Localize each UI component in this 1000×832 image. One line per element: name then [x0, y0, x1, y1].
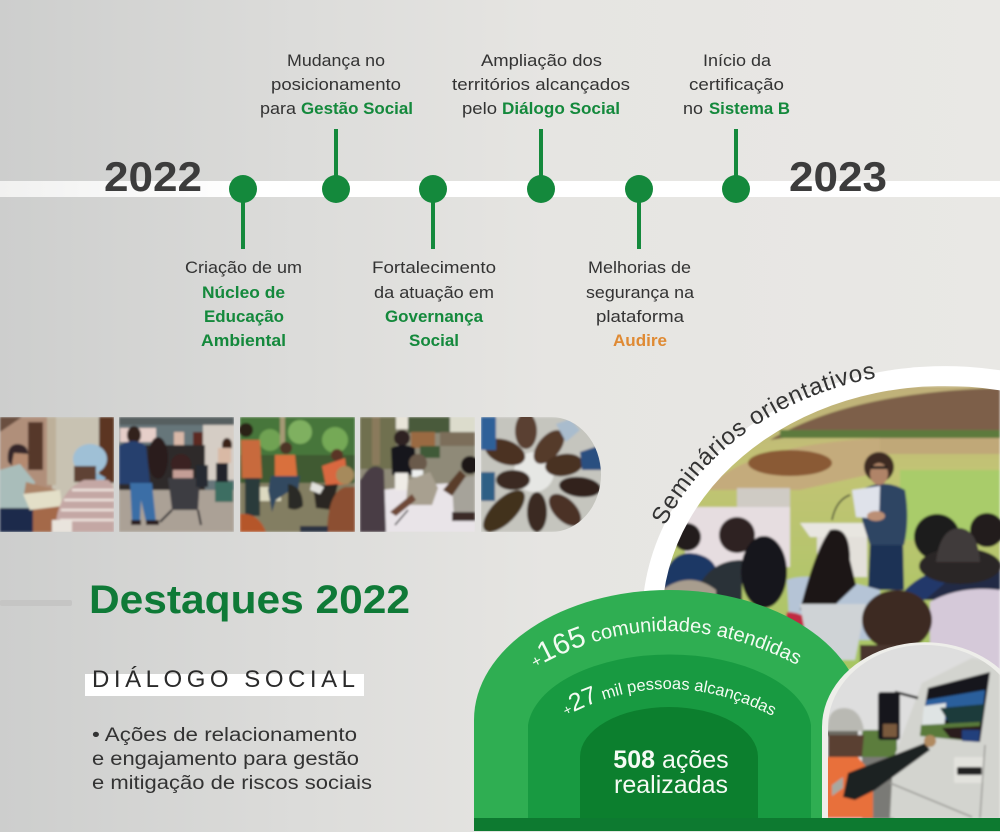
milestone: Governança Social: [372, 175, 496, 350]
bottom green bar: [474, 818, 1000, 831]
milestone: Núcleo de Educação Ambiental: Núcleo de: [202, 283, 285, 302]
body text: e engajamento para gestão: [92, 749, 359, 770]
milestone: Diálogo Social: Diálogo Social: [502, 99, 620, 118]
green arch: 27 thousand people: [528, 654, 811, 818]
white ring of truck photo: [822, 642, 1000, 818]
photo: conversation at the door: [0, 417, 114, 532]
body text: [92, 725, 372, 794]
photo: indoor meeting: [119, 417, 234, 532]
year 2022: 2022: [104, 153, 202, 200]
milestone: Sistema B: [683, 51, 790, 203]
milestone: Gestão Social: [260, 51, 413, 203]
body text: e mitigação de riscos sociais: [92, 773, 372, 794]
green arch: 508 actions: realizadas: [614, 771, 728, 799]
milestone: Diálogo Social: [452, 51, 630, 203]
milestone: Governança Social: da atuação em: [374, 283, 494, 302]
green arch: 165 communities: +165 comunidades atendidas: [532, 616, 800, 665]
milestone: Gestão Social: para: [260, 99, 297, 118]
milestone: Audire: [586, 175, 695, 350]
milestone: Audire: segurança na: [586, 283, 695, 302]
green arch: 508 actions: [580, 707, 758, 818]
milestone: Diálogo Social: Ampliação dos: [481, 51, 602, 70]
heading: Destaques 2022: Destaques 2022: [89, 578, 410, 622]
milestone: Gestão Social: posicionamento: [271, 75, 401, 94]
milestone: Sistema B: Início da: [703, 51, 772, 70]
green arch: 508 actions: 508 ações: [613, 746, 729, 774]
curved label: Seminários orientativos: Seminários orientativos: [652, 366, 875, 524]
milestone: Sistema B: Sistema B: [709, 99, 790, 118]
photo: truck driver: [823, 640, 1000, 820]
milestone: Diálogo Social: territórios alcançados: [452, 75, 630, 94]
photo: meeting under trees: [239, 417, 355, 532]
milestone: Audire: plataforma: [596, 307, 685, 326]
milestone: Diálogo Social: pelo: [462, 99, 497, 118]
milestone: Audire: Audire: [613, 331, 667, 350]
photo: group at table outdoors: [360, 417, 479, 532]
milestone: Governança Social: Fortalecimento: [372, 258, 496, 277]
milestone: Gestão Social: Mudança no: [287, 51, 385, 70]
subheading: Diálogo Social: DIÁLOGO SOCIAL: [92, 666, 355, 693]
highlights title rule: [0, 600, 72, 606]
milestone: Governança Social: Social: [409, 331, 459, 350]
green arch: 27 thousand people: +27 mil pessoas alcançadas: [564, 680, 776, 715]
photo: seminar: [660, 386, 1000, 670]
milestone: Governança Social: Governança: [385, 307, 484, 326]
body text: • Ações de relacionamento: [92, 725, 357, 746]
milestone: Audire: Melhorias de: [588, 258, 691, 277]
milestone: Núcleo de Educação Ambiental: Educação: [204, 307, 284, 326]
white ring of seminar photo: [642, 366, 1000, 818]
milestone: Sistema B: certificação: [689, 75, 784, 94]
milestone: Núcleo de Educação Ambiental: Ambiental: [201, 331, 286, 350]
milestone: Gestão Social: Gestão Social: [301, 99, 413, 118]
milestone: Núcleo de Educação Ambiental: [185, 175, 302, 350]
year 2023: 2023: [789, 153, 887, 200]
milestone: Núcleo de Educação Ambiental: Criação de um: [185, 258, 302, 277]
timeline band: [0, 181, 1000, 197]
green arch: 165 communities: [474, 590, 849, 818]
milestone: Sistema B: no: [683, 99, 703, 118]
photo: circle of boots: [481, 417, 601, 532]
